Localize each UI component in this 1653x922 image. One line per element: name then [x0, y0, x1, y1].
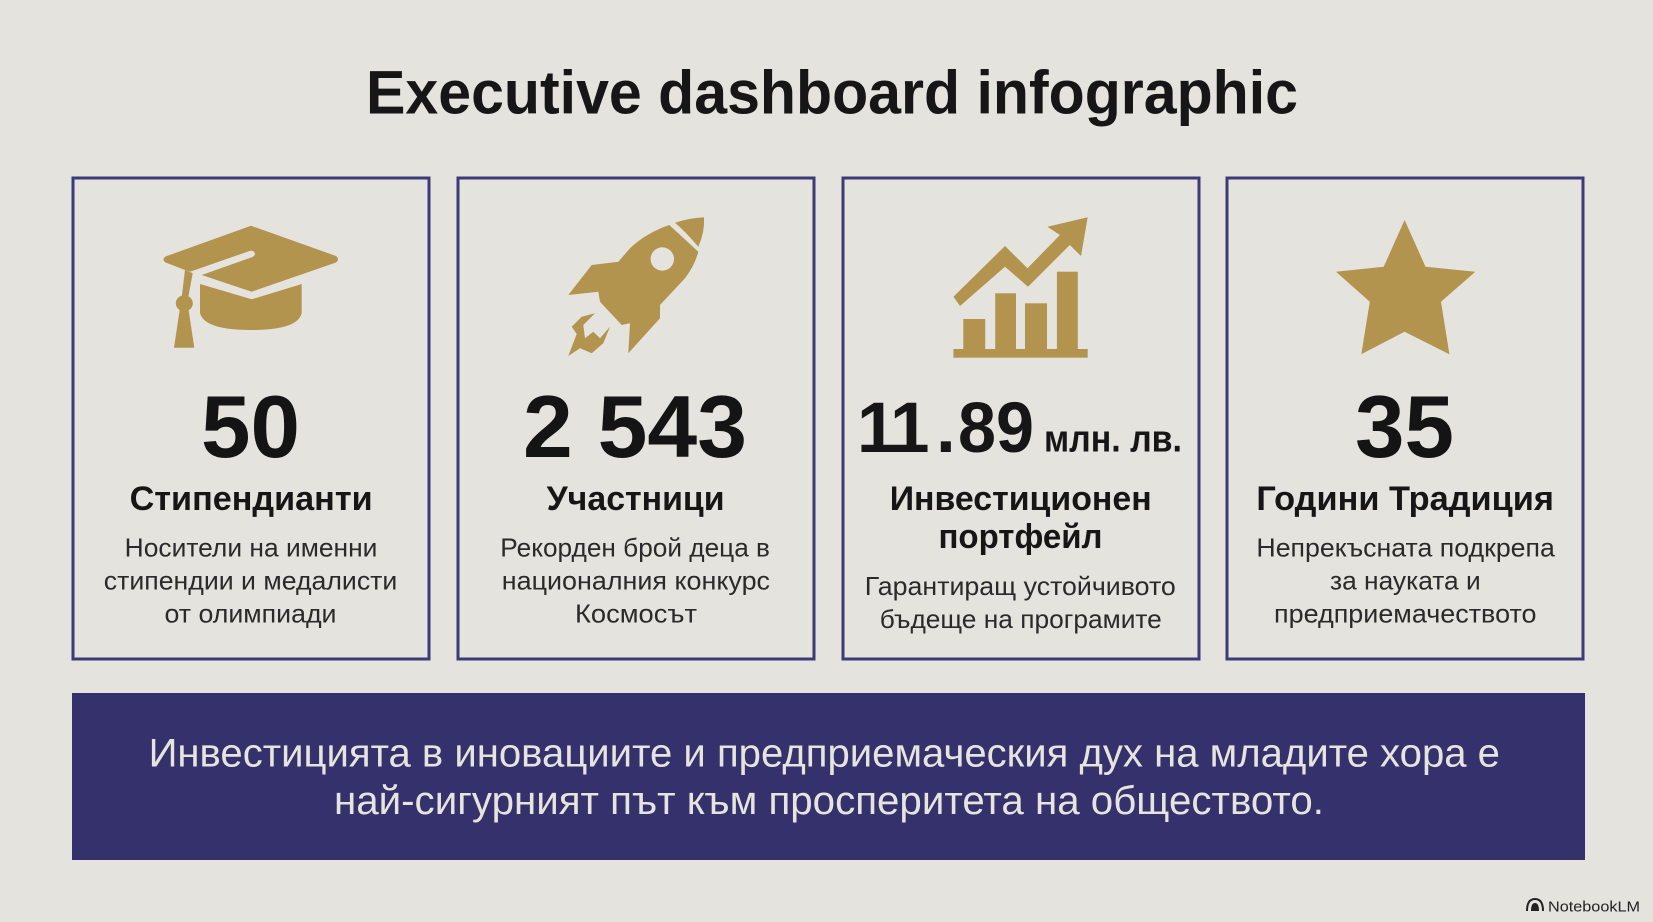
number: .: [936, 389, 956, 468]
banner: [72, 693, 1585, 860]
panel: portfolio: [843, 178, 1199, 659]
description: Гарантиращ устойчивото: [865, 571, 1176, 601]
number: 50: [201, 377, 300, 476]
logo: NotebookLM: NotebookLM: [1548, 898, 1640, 916]
panel: scholars: [73, 178, 429, 659]
label: портфейл: [938, 518, 1102, 556]
banner text: Инвестицията в иновациите и предприемаческия дух на младите хора е: [149, 732, 1500, 776]
banner text: най-сигурният път към просперитета на обществото.: [334, 779, 1324, 823]
icon: rocket: [568, 217, 704, 356]
number: 35: [1355, 377, 1454, 476]
banner text: [149, 732, 1500, 823]
icon: growth chart: [953, 217, 1088, 358]
number: 1: [857, 389, 896, 468]
icon: graduation cap: [164, 226, 338, 348]
title: Executive dashboard infographic: [366, 58, 1298, 126]
description: предприемачеството: [1274, 598, 1536, 628]
description: Носители на именни: [125, 532, 377, 562]
description: Космосът: [575, 598, 697, 628]
description: [1256, 532, 1555, 628]
label: Участници: [547, 480, 725, 518]
description: стипендии и медалисти: [104, 566, 397, 596]
icon: star: [1336, 220, 1475, 354]
number: 89: [958, 389, 1034, 468]
description: националния конкурс: [502, 566, 770, 596]
description: Рекорден брой деца в: [500, 532, 770, 562]
description: [865, 571, 1176, 634]
number: [857, 389, 1182, 468]
number: 2 543: [523, 377, 747, 476]
description: [104, 532, 397, 628]
panel: tradition: [1227, 178, 1583, 659]
description: от олимпиади: [164, 598, 336, 628]
label: [890, 480, 1152, 556]
label: Стипендианти: [130, 480, 373, 518]
number: 1: [890, 389, 930, 468]
description: [500, 532, 770, 628]
label: Години Традиция: [1256, 480, 1554, 518]
description: Непрекъсната подкрепа: [1256, 532, 1555, 562]
label: Инвестиционен: [890, 480, 1152, 518]
panel: participants: [458, 178, 814, 659]
number: млн. лв.: [1044, 419, 1182, 461]
description: бъдеще на програмите: [880, 604, 1162, 634]
description: за науката и: [1330, 566, 1481, 596]
